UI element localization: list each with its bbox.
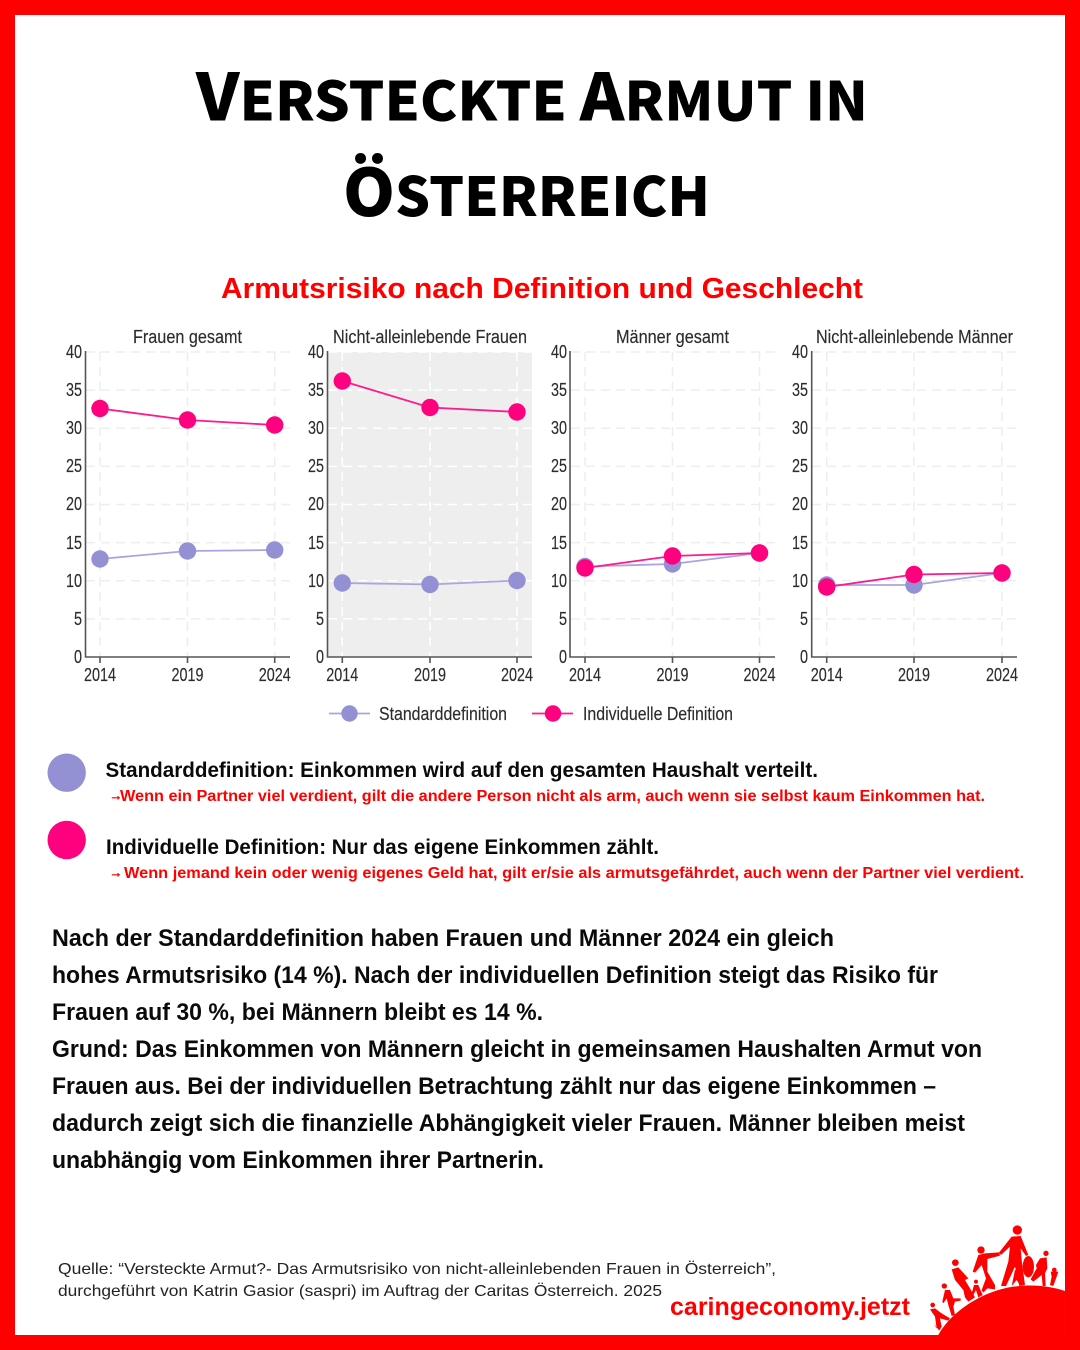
source note: durchgeführt von Katrin Gasior (saspri) im Auftrag der Caritas Österreich. 2025 [58, 1282, 662, 1300]
chart: Nicht-alleinlebende Frauen: 0 [316, 647, 324, 667]
chart legend: Standarddefinition [379, 704, 507, 724]
definition: Individuelle Definition: → [110, 865, 122, 880]
chart: Nicht-alleinlebende Männer: 2019 [898, 665, 930, 685]
chart: Männer gesamt: 2014 [569, 665, 601, 685]
chart: Frauen gesamt: 10 [66, 571, 82, 591]
chart: Nicht-alleinlebende Männer: 30 [792, 418, 808, 438]
chart: Frauen gesamt [66, 327, 291, 685]
explanation text: hohes Armutsrisiko (14 %). Nach der individuellen Definition steigt das Risiko für [52, 962, 938, 989]
explanation text: Nach der Standarddefinition haben Frauen und Männer 2024 ein gleich [52, 925, 834, 952]
title: ÖSTERREICH [343, 141, 710, 235]
chart: Nicht-alleinlebende Frauen: 2019 [414, 665, 446, 685]
definition: Individuelle Definition: Individuelle Definition: Nur das eigene Einkommen zählt. [106, 836, 659, 859]
title: VERSTECKTE ARMUT IN [195, 46, 868, 140]
definition: Standarddefinition [106, 759, 985, 805]
chart: Frauen gesamt: Frauen gesamt [133, 327, 242, 347]
chart: Frauen gesamt: 40 [66, 342, 82, 362]
chart: Nicht-alleinlebende Frauen: 30 [308, 418, 324, 438]
chart: Nicht-alleinlebende Männer [792, 327, 1018, 685]
chart: Frauen gesamt: 15 [66, 533, 82, 553]
definition: Standarddefinition: Wenn ein Partner viel verdient, gilt die andere Person nicht als arm, auch wenn sie selbst kaum Einkommen hat. [120, 788, 985, 805]
explanation text [52, 925, 982, 1174]
chart: Nicht-alleinlebende Frauen: 25 [308, 456, 324, 476]
chart: Nicht-alleinlebende Frauen: 2014 [326, 665, 358, 685]
chart: Frauen gesamt: 5 [74, 609, 82, 629]
explanation text: unabhängig vom Einkommen ihrer Partnerin. [52, 1147, 544, 1174]
chart: Nicht-alleinlebende Männer: 10 [792, 571, 808, 591]
chart: Männer gesamt: 30 [551, 418, 567, 438]
chart: Frauen gesamt: 2024 [259, 665, 291, 685]
logo: family silhouettes on hill [930, 1225, 1065, 1335]
chart: Nicht-alleinlebende Frauen: 20 [308, 494, 324, 514]
chart: Frauen gesamt: 30 [66, 418, 82, 438]
chart: Nicht-alleinlebende Frauen: 2024 [501, 665, 533, 685]
chart: Nicht-alleinlebende Männer: 35 [792, 380, 808, 400]
chart: Nicht-alleinlebende Männer: 0 [800, 647, 808, 667]
explanation text: dadurch zeigt sich die finanzielle Abhängigkeit vieler Frauen. Männer bleiben meist [52, 1110, 965, 1137]
title [195, 46, 868, 235]
chart: Männer gesamt: 40 [551, 342, 567, 362]
chart: Nicht-alleinlebende Frauen: 10 [308, 571, 324, 591]
chart: Männer gesamt: 0 [559, 647, 567, 667]
chart: Nicht-alleinlebende Männer: 40 [792, 342, 808, 362]
chart: Nicht-alleinlebende Männer: Nicht-alleinlebende Männer [816, 327, 1013, 347]
chart: Männer gesamt: 20 [551, 494, 567, 514]
chart: Nicht-alleinlebende Männer: 2024 [986, 665, 1018, 685]
chart: Männer gesamt: Männer gesamt [616, 327, 729, 347]
explanation text: Frauen auf 30 %, bei Männern bleibt es 14 %. [52, 999, 543, 1026]
chart: Nicht-alleinlebende Männer: 15 [792, 533, 808, 553]
chart: Frauen gesamt: 2019 [172, 665, 204, 685]
chart: Männer gesamt: 15 [551, 533, 567, 553]
chart: Männer gesamt: 10 [551, 571, 567, 591]
explanation text: Frauen aus. Bei der individuellen Betrachtung zählt nur das eigene Einkommen – [52, 1073, 936, 1100]
chart: Männer gesamt: 25 [551, 456, 567, 476]
explanation text: Grund: Das Einkommen von Männern gleicht in gemeinsamen Haushalten Armut von [52, 1036, 982, 1063]
chart: Männer gesamt: 5 [559, 609, 567, 629]
chart: Frauen gesamt: 2014 [84, 665, 116, 685]
chart: Männer gesamt: 2019 [656, 665, 688, 685]
icon: pink dot [47, 821, 86, 859]
definition: Standarddefinition: Standarddefinition: Einkommen wird auf den gesamten Haushalt verteilt. [106, 759, 818, 782]
source note [58, 1260, 776, 1300]
chart: Nicht-alleinlebende Frauen: 40 [308, 342, 324, 362]
chart: Nicht-alleinlebende Männer: 25 [792, 456, 808, 476]
chart: Nicht-alleinlebende Frauen [308, 327, 533, 685]
chart: Männer gesamt: 35 [551, 380, 567, 400]
chart legend: Individuelle Definition [583, 704, 733, 724]
chart: Nicht-alleinlebende Männer: 2014 [811, 665, 843, 685]
chart: Männer gesamt [551, 327, 776, 685]
chart: Frauen gesamt: 0 [74, 647, 82, 667]
chart: Nicht-alleinlebende Frauen: Nicht-alleinlebende Frauen [333, 327, 527, 347]
icon: purple dot [47, 754, 86, 792]
definition: Individuelle Definition: Wenn jemand kein oder wenig eigenes Geld hat, gilt er/sie als armutsgefährdet, auch wenn der Partner viel verdient. [124, 865, 1024, 882]
definition: Standarddefinition: → [110, 788, 122, 803]
source note: Quelle: “Versteckte Armut?- Das Armutsrisiko von nicht-alleinlebenden Frauen in Österreich”, [58, 1260, 776, 1278]
chart: Männer gesamt: 2024 [744, 665, 776, 685]
chart: Nicht-alleinlebende Frauen: 15 [308, 533, 324, 553]
chart legend [329, 704, 733, 724]
chart: Frauen gesamt: 25 [66, 456, 82, 476]
subtitle: Armutsrisiko nach Definition und Geschlecht [221, 273, 863, 305]
website: caringeconomy.jetzt [670, 1293, 911, 1321]
chart: Frauen gesamt: 20 [66, 494, 82, 514]
chart: Nicht-alleinlebende Männer: 20 [792, 494, 808, 514]
chart: Frauen gesamt: 35 [66, 380, 82, 400]
chart: Nicht-alleinlebende Frauen: 5 [316, 609, 324, 629]
chart: Nicht-alleinlebende Männer: 5 [800, 609, 808, 629]
definition: Individuelle Definition [106, 836, 1024, 882]
chart: Nicht-alleinlebende Frauen: 35 [308, 380, 324, 400]
